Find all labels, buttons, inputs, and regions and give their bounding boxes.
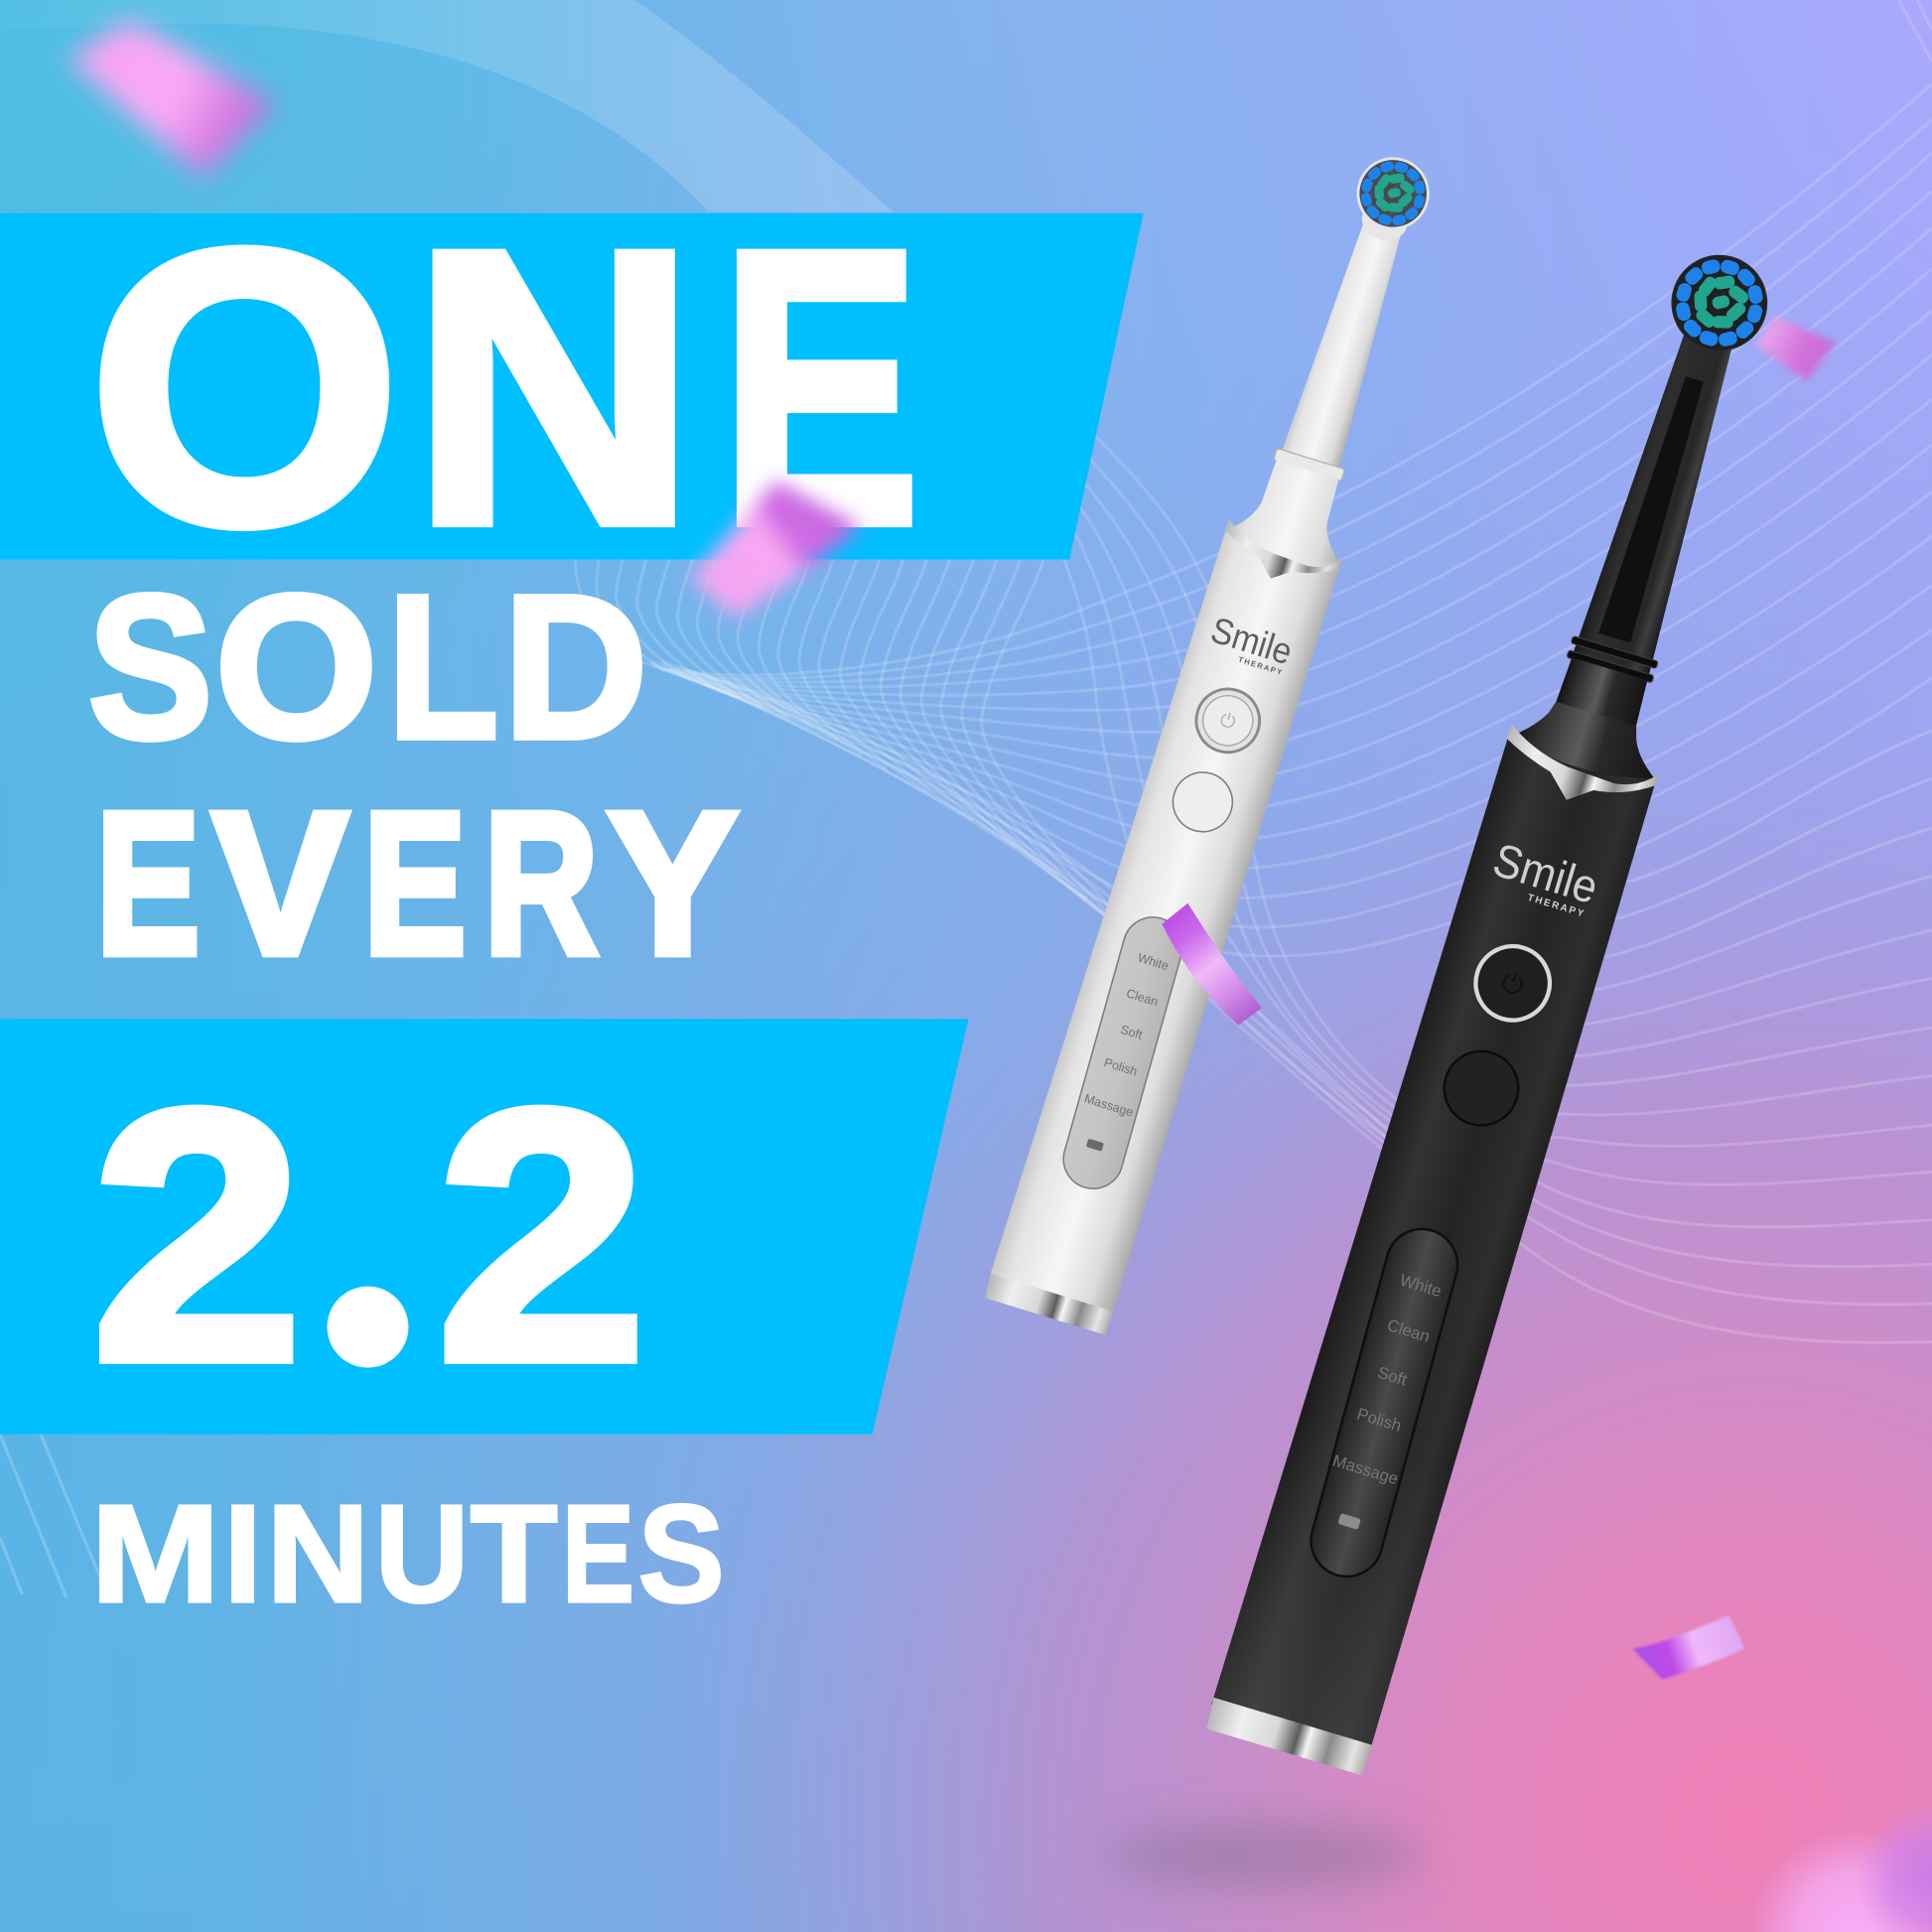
white brush mode panel: Polish <box>1102 1055 1139 1079</box>
black brush neck <box>1503 692 1669 803</box>
floating shadow under brushes <box>1105 1824 1426 1887</box>
white brush mode panel <box>1049 908 1196 1197</box>
word: ONE: O <box>88 170 401 606</box>
black brush handle lower sheen <box>1211 732 1661 1752</box>
white brush power button <box>1188 681 1268 760</box>
black brush logo: Smile <box>1487 833 1604 913</box>
white brush collar <box>1274 448 1345 482</box>
black brush power button <box>1466 937 1559 1030</box>
white toothbrush <box>983 139 1465 1335</box>
word: SOLD: L <box>387 553 498 781</box>
white brush mode panel: Massage <box>1082 1091 1135 1120</box>
confetti: blurred top left <box>68 20 276 178</box>
headline text <box>88 170 920 1631</box>
word: EVERY: Y <box>608 771 738 997</box>
white brush logo: THERAPY <box>1237 655 1285 677</box>
word: EVERY: E <box>363 771 466 997</box>
word: MINUTES: I <box>223 1475 262 1631</box>
black toothbrush <box>1204 233 1812 1776</box>
black brush head <box>1660 244 1778 362</box>
word: MINUTES: U <box>375 1475 469 1631</box>
white brush mode panel: Soft <box>1119 1023 1145 1042</box>
black brush mode panel: Clean <box>1385 1315 1432 1346</box>
confetti: blurred center <box>690 481 863 619</box>
black brush mode panel: White <box>1398 1271 1444 1301</box>
white brush neck <box>1222 452 1364 582</box>
confetti: lower right ribbon <box>1632 1615 1744 1680</box>
black brush lower tube <box>1556 657 1650 728</box>
round decimal point <box>328 1287 408 1368</box>
word: MINUTES: S <box>638 1475 725 1631</box>
confetti: blurred corner <box>1749 1803 1932 1932</box>
word: MINUTES: N <box>266 1475 369 1631</box>
black brush chrome base <box>1204 1698 1373 1776</box>
wave line pattern: lower envelope bundle <box>576 559 1417 1176</box>
number: 2.2: 2 <box>91 1036 303 1436</box>
black brush collar rings <box>1567 636 1658 683</box>
banner: middle <box>0 1019 968 1435</box>
white brush mode panel: Clean <box>1125 986 1160 1009</box>
white brush handle <box>989 525 1344 1317</box>
word: ONE: E <box>721 170 920 606</box>
black brush mode panel: Polish <box>1355 1404 1404 1436</box>
white brush head <box>1347 148 1439 239</box>
black brush mode panel: Massage <box>1330 1451 1401 1488</box>
banner: top <box>0 213 1144 559</box>
word: EVERY: E <box>96 771 200 997</box>
confetti: small blurred right <box>1756 317 1836 380</box>
number: 2.2: . <box>348 1036 387 1436</box>
word: MINUTES: E <box>562 1475 634 1631</box>
word: SOLD: S <box>88 553 212 781</box>
black brush shaft <box>1574 327 1746 674</box>
white brush shaft <box>1278 211 1414 482</box>
black brush mode panel <box>1294 1219 1474 1587</box>
white brush power button: ⏻ <box>1217 710 1238 734</box>
bottom left diagonal lines <box>0 1435 101 1598</box>
white brush logo: Smile <box>1206 610 1297 672</box>
white brush mode panel: White <box>1136 950 1171 973</box>
white brush second button <box>1166 764 1240 839</box>
word: MINUTES: M <box>90 1475 220 1631</box>
black brush power button: ⏻ <box>1498 966 1527 1002</box>
black brush logo: THERAPY <box>1526 893 1587 920</box>
black brush second button <box>1436 1042 1527 1134</box>
word: ONE: N <box>411 170 697 606</box>
wave line pattern: mesh verticals from the banner <box>597 559 1226 1009</box>
white brush chrome base <box>983 1274 1114 1335</box>
word: EVERY: R <box>484 771 598 997</box>
wave line pattern: lines from banner corner into the bundle <box>1059 425 1417 1159</box>
word: MINUTES: T <box>471 1475 558 1631</box>
black brush chrome shoulder <box>1494 724 1661 823</box>
white brush head holder <box>1357 196 1412 246</box>
number: 2.2: 2 <box>437 1036 647 1436</box>
pale curved band top left <box>0 0 894 211</box>
white brush chrome shoulder <box>1215 519 1344 598</box>
word: EVERY: V <box>212 771 347 997</box>
wave line pattern: concentric arcs lower right <box>1430 731 1932 1342</box>
wave line pattern: arcs toward upper right <box>653 0 1932 956</box>
confetti: ribbon over white brush <box>1162 903 1262 1026</box>
black brush shaft groove <box>1598 373 1709 643</box>
word: SOLD: O <box>215 553 377 781</box>
word: SOLD: D <box>503 553 647 781</box>
black brush mode panel: Soft <box>1375 1363 1410 1390</box>
black brush handle <box>1211 732 1661 1752</box>
